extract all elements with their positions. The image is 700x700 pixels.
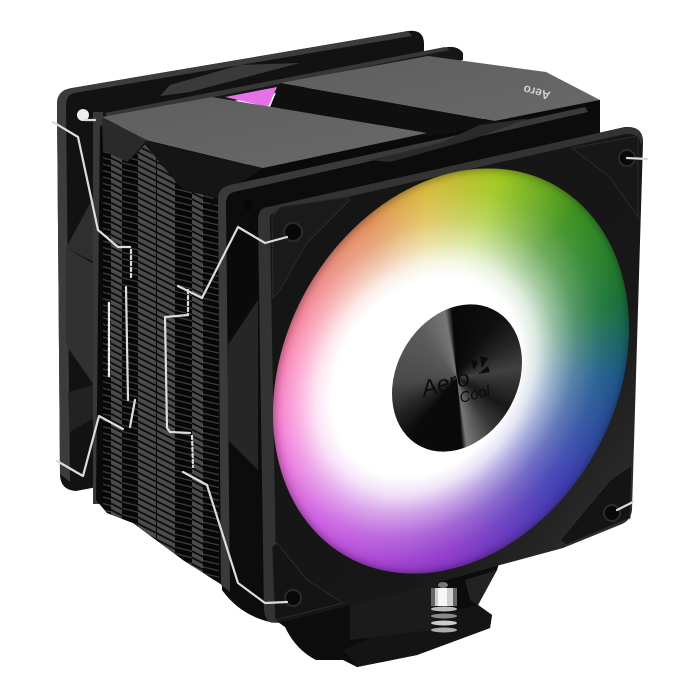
front heat pipe cover [102,97,427,198]
hub logo [417,356,492,407]
front fan frame [258,127,643,623]
hub logo: Aero [417,364,472,402]
rear heat pipe cover right [105,47,600,205]
cover logo: Aero [522,82,552,103]
hub logo: Cool [458,382,492,407]
fan hub [392,290,522,466]
retention clip wires [53,120,647,603]
rear fan frame [57,31,424,491]
corner plate top-left [272,197,350,298]
cooler body behind the fan [57,30,643,667]
corner plate top-right [572,136,638,217]
RGB fan [273,130,629,612]
corner plate bottom-left [272,543,343,620]
mounting screws [284,150,635,606]
CPU cooler product image [52,30,648,667]
mounting bracket and base [225,560,500,667]
corner plate bottom-right [560,465,632,545]
spring screw [431,582,457,632]
heatsink fin stack [93,112,222,585]
middle fan frame [218,107,600,622]
